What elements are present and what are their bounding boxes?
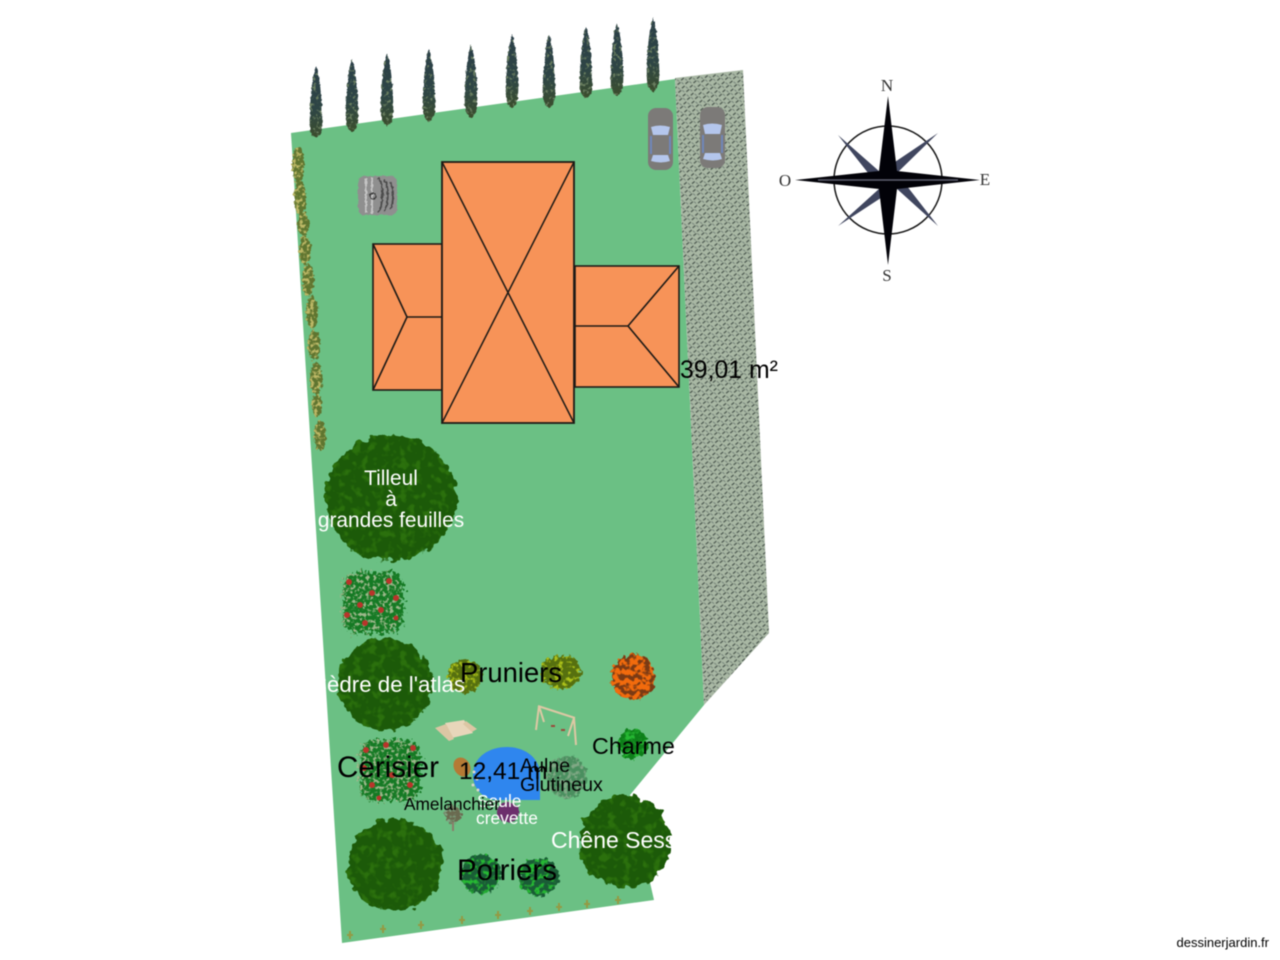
icon: swing bbox=[536, 706, 576, 745]
tree: Chêne bbox=[579, 796, 671, 888]
hedge along left border bbox=[292, 147, 326, 451]
label: Cèdre de l'atlas: Cèdre de l'atlas bbox=[311, 672, 465, 697]
label: Aulne Glutineux: Glutineux bbox=[520, 774, 603, 796]
label: Tilleul: grandes feuilles bbox=[318, 509, 464, 532]
shrub: plum left bbox=[448, 659, 482, 693]
bottom border plants bbox=[347, 896, 621, 939]
tree: Tilleul bbox=[325, 435, 457, 561]
house roof bbox=[373, 162, 679, 423]
compass letters: O bbox=[779, 171, 791, 190]
pond bbox=[473, 747, 540, 800]
shrub: Saule crevette bbox=[497, 802, 519, 822]
right wing bbox=[575, 266, 679, 387]
compass rose bbox=[779, 76, 990, 285]
shrub: Amelanchier bbox=[444, 806, 462, 831]
compass letters bbox=[779, 76, 990, 285]
label: Aulne Glutineux: Aulne bbox=[520, 755, 570, 777]
label: pond area: 12,41 m² bbox=[459, 758, 556, 785]
shrub: pear right bbox=[519, 858, 559, 896]
garden plan bbox=[290, 17, 1270, 950]
icon: water tank bbox=[358, 176, 397, 215]
label: Amelanchier: Amelanchier bbox=[404, 794, 500, 814]
compass letters: E bbox=[980, 170, 990, 189]
tree: Cèdre bbox=[338, 638, 432, 730]
label: Saule crevette: Saule bbox=[477, 791, 521, 811]
shrub: Cerisier bbox=[360, 740, 420, 801]
credit: dessinerjardin.fr bbox=[1176, 935, 1270, 950]
shrub: pear left bbox=[461, 854, 501, 894]
label: Tilleul: à bbox=[385, 488, 397, 511]
shrub: Aulne bbox=[547, 756, 587, 798]
tree: unnamed south-west bbox=[347, 819, 443, 911]
shrub: orange bbox=[611, 654, 655, 700]
gravel driveway bbox=[675, 70, 769, 705]
cardinal points bbox=[795, 96, 980, 265]
label: Chêne Sessile: Chêne Sessile bbox=[551, 827, 699, 853]
lawn bbox=[291, 79, 704, 943]
compass ring bbox=[834, 126, 942, 234]
left wing bbox=[373, 244, 442, 390]
label: house area: 39,01 m² bbox=[680, 357, 778, 384]
main roof bbox=[442, 162, 574, 423]
label: Tilleul: Tilleul bbox=[364, 467, 418, 490]
diagonal points bbox=[838, 133, 938, 226]
icon: picnic table bbox=[435, 720, 477, 741]
cars bbox=[648, 107, 725, 170]
label: Pruniers: Pruniers bbox=[460, 657, 562, 688]
shrub: plum right bbox=[541, 655, 581, 689]
compass letters: S bbox=[882, 266, 892, 285]
label: Saule crevette: crevette bbox=[476, 808, 538, 828]
car 1 bbox=[648, 108, 673, 170]
shrub: Charme bbox=[618, 729, 648, 759]
label: Charme: Charme bbox=[592, 733, 675, 759]
icon: rock bbox=[450, 754, 474, 780]
shrub: rose bush bbox=[343, 572, 403, 633]
car 2 bbox=[700, 107, 725, 168]
label: Cerisier: Cerisier bbox=[337, 751, 439, 784]
pond stones bbox=[472, 770, 480, 792]
cypress row bbox=[310, 18, 659, 138]
label: Poiriers: Poiriers bbox=[457, 854, 557, 887]
compass letters: N bbox=[881, 76, 893, 95]
